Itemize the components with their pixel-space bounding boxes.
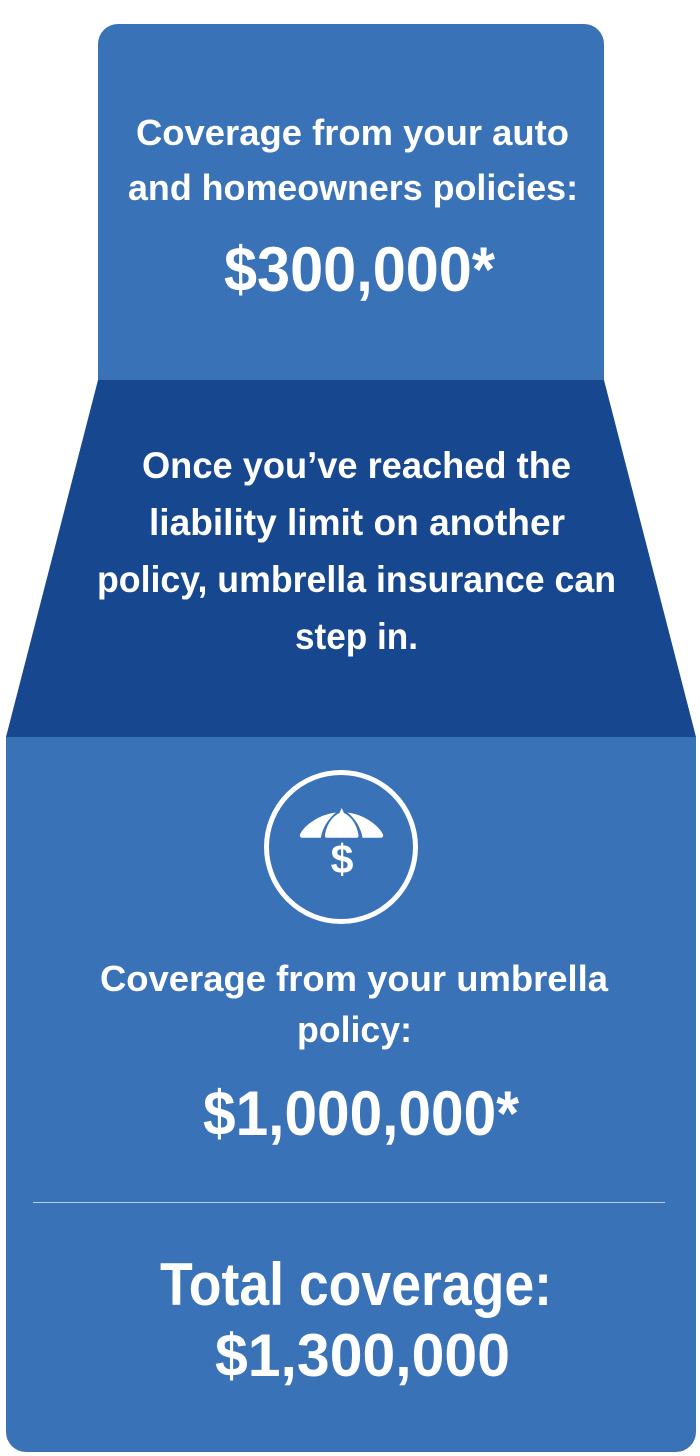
text: total coverage: Total coverage: <box>160 1251 552 1318</box>
text: $300,000 amount: $300,000* <box>224 235 495 305</box>
text: umbrella coverage label: policy: <box>297 1009 412 1050</box>
text: $1,000,000 amount: $1,000,000* <box>203 1079 519 1149</box>
panel: auto and homeowners coverage <box>98 24 604 381</box>
text: liability limit explanation: policy, umbrella insurance can <box>97 559 616 600</box>
text: liability limit explanation: liability limit on another <box>149 502 565 543</box>
text: auto and homeowners coverage label <box>128 112 578 208</box>
text: umbrella coverage label <box>100 958 609 1050</box>
text: umbrella coverage label: Coverage from your umbrella <box>100 958 609 999</box>
text: auto and homeowners coverage label: Coverage from your auto <box>136 112 569 153</box>
icon: umbrella with dollar sign <box>266 772 416 922</box>
text: liability limit explanation: Once you’ve reached the <box>142 445 571 486</box>
icon: umbrella with dollar sign: $ <box>331 836 354 882</box>
text: total coverage <box>160 1251 552 1389</box>
text: liability limit explanation <box>97 445 616 657</box>
text: liability limit explanation: step in. <box>295 616 418 657</box>
text: auto and homeowners coverage label: and homeowners policies: <box>128 167 578 208</box>
text: total coverage: $1,300,000 <box>215 1322 510 1389</box>
panel: umbrella coverage and total <box>6 737 696 1452</box>
panel: umbrella transition trapezoid <box>6 380 696 737</box>
